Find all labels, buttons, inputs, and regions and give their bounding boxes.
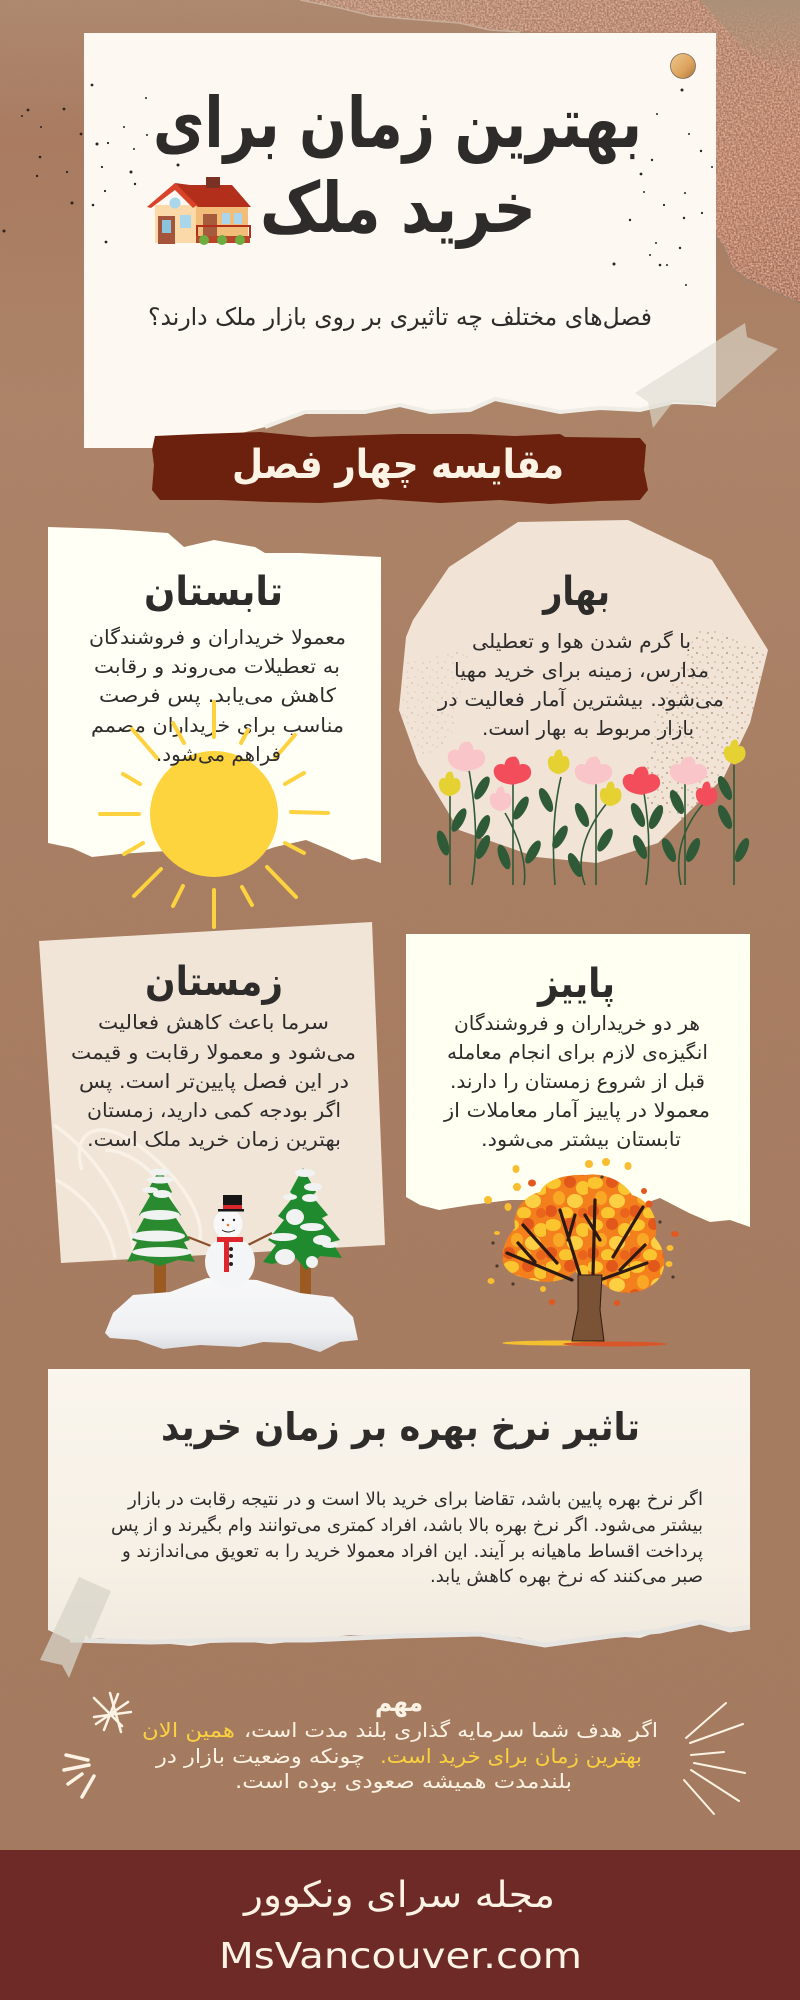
icon: snowman scene (105, 1168, 358, 1352)
panel: interest rate (48, 1369, 750, 1646)
icon: right burst (684, 1703, 745, 1814)
body: interest rate: پرداخت اقساط ماهیانه بر آیند. این افراد معمولا خرید را به تعویق می‌اندازند و (121, 1539, 703, 1562)
body: autumn: هر دو خریداران و فروشندگان (454, 1012, 700, 1035)
heading: important: مهم (375, 1688, 423, 1718)
body: winter: در این فصل پایین‌تر است. پس (79, 1070, 349, 1093)
body: autumn: قبل از شروع زمستان را دارند. (450, 1070, 705, 1093)
heading: interest rate: تاثیر نرخ بهره بر زمان خرید (161, 1405, 640, 1449)
body: interest rate: بیشتر می‌شود. اگر نرخ بهره بالا باشد، افراد کمتری می‌توانند وام بگیرند و از پس (111, 1514, 703, 1536)
body: autumn: انگیزه‌ی لازم برای انجام معامله (447, 1041, 708, 1064)
note text: بهترین زمان برای خرید است. (380, 1744, 642, 1768)
body: spring: با گرم شدن هوا و تعطیلی (472, 630, 691, 653)
panel: autumn (406, 934, 750, 1346)
footer: MsVancouver.com (219, 1936, 582, 1977)
icon: masking tape top right (635, 323, 778, 428)
body: interest rate: اگر نرخ بهره پایین باشد، تقاضا برای خرید بالا است و در نتیجه رقابت در بازار (127, 1488, 703, 1510)
heading: winter: زمستان (145, 959, 283, 1005)
body: spring (437, 630, 724, 740)
body: interest rate: صبر می‌کنند که نرخ بهره کاهش یابد. (430, 1566, 703, 1587)
decorative copper paper corner (300, 0, 800, 303)
body: winter: اگر بودجه کمی دارید، زمستان (87, 1099, 341, 1122)
icon: masking tape bottom left (40, 1577, 111, 1678)
body: summer: به تعطیلات می‌روند و رقابت (94, 655, 340, 678)
tree right (263, 1168, 342, 1270)
body: interest rate (111, 1488, 703, 1587)
title: خرید ملک (260, 167, 536, 249)
callout: important note (64, 1688, 745, 1814)
body: autumn: معمولا در پاییز آمار معاملات از (443, 1098, 710, 1122)
note text: همین الان (142, 1718, 235, 1742)
banner: comparison of four seasons: مقایسه چهار فصل (232, 442, 564, 488)
body: summer: مناسب برای خریداران مصمم (91, 714, 344, 737)
banner: comparison of four seasons (152, 432, 648, 504)
footer: مجله سرای ونکوور (242, 1875, 555, 1916)
panel: title card (2, 33, 716, 448)
snowman (188, 1195, 272, 1288)
tree left (127, 1168, 195, 1266)
body: spring: مدارس، زمینه برای خرید مهیا (454, 659, 709, 682)
body: summer (89, 626, 346, 737)
body: summer: کاهش می‌یابد. پس فرصت (99, 684, 337, 707)
icon: sun (100, 702, 328, 927)
body: autumn (443, 1012, 710, 1151)
heading: summer: تابستان (144, 569, 283, 615)
body: spring: می‌شود. بیشترین آمار فعالیت در (437, 687, 724, 711)
panel: spring (399, 520, 768, 885)
title (153, 82, 642, 249)
ink speckles (2, 84, 713, 286)
body: winter: سرما باعث کاهش فعالیت (98, 1011, 329, 1034)
heading: spring: بهار (541, 569, 610, 615)
body: winter: بهترین زمان خرید ملک است. (87, 1128, 341, 1151)
body: summer: معمولا خریداران و فروشندگان (89, 626, 346, 649)
heading: autumn: پاییز (536, 961, 615, 1007)
icon: left burst (64, 1755, 94, 1797)
note text: بلندمدت همیشه صعودی بوده است. (235, 1769, 572, 1793)
icon: star doodle (94, 1693, 131, 1732)
subtitle: فصل‌های مختلف چه تاثیری بر روی بازار ملک دارند؟ (148, 303, 652, 331)
note text: اگر هدف شما سرمایه گذاری بلند مدت است، (244, 1718, 658, 1742)
title: بهترین زمان برای (153, 82, 642, 164)
note text: چونکه وضعیت بازار در (155, 1744, 365, 1768)
pin (670, 54, 696, 78)
icon: house (147, 177, 251, 245)
footer (0, 1850, 800, 2000)
icon: autumn tree (484, 1158, 679, 1346)
panel: summer (48, 527, 381, 927)
note text (142, 1718, 658, 1793)
body: winter: می‌شود و معمولا رقابت و قیمت (71, 1041, 356, 1064)
panel: summer: فراهم می‌شود. (156, 743, 281, 766)
body: spring: بازار مربوط به بهار است. (482, 717, 694, 740)
panel: winter (39, 922, 385, 1352)
body: winter (71, 1011, 356, 1151)
body: autumn: تابستان بیشتر می‌شود. (481, 1128, 681, 1151)
decorative scribble (54, 1125, 200, 1260)
icon: flowers (434, 740, 752, 885)
